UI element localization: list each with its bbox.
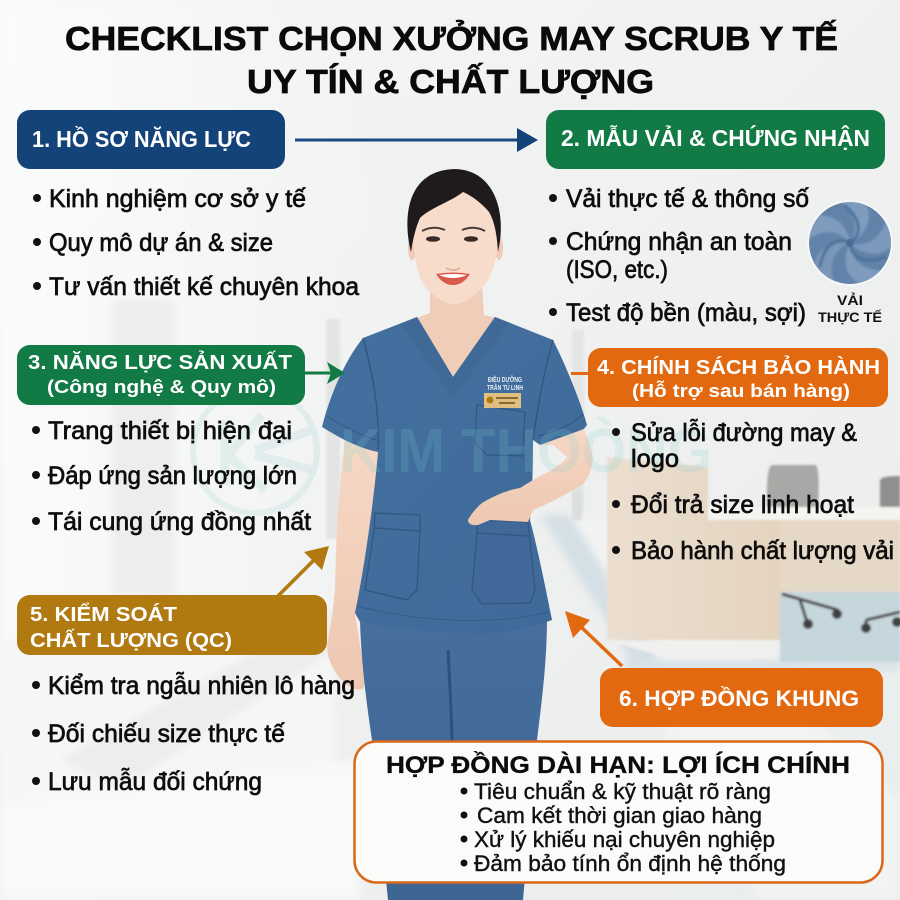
title: UY TÍN & CHẤT LƯỢNG [247,63,654,100]
panel: step 6 heading [600,668,883,727]
facial features [422,228,485,285]
panel: long-term contract benefits [354,742,882,882]
panel: step 5 heading: CHẤT LƯỢNG (QC) [30,629,232,652]
trousers [360,618,547,900]
benefits heading: HỢP ĐỒNG DÀI HẠN: LỢI ÍCH CHÍNH [386,751,850,779]
list: step 5 items [32,671,355,796]
arrow: step 4 connector [571,372,591,375]
list: step 1 items [33,185,359,301]
panel: step 2 heading: 2. MẪU VẢI & CHỨNG NHẬN [561,123,870,151]
hair [407,169,501,252]
panel: step 5 heading [17,595,327,655]
list: step 3 items: Trang thiết bị hiện đại [48,417,292,445]
list: step 4 items: Sửa lỗi đường may & [631,418,857,447]
fabric label [818,292,882,325]
arrow: step 6 to figure [565,611,622,666]
watermark logo [193,389,317,513]
right pocket [472,520,535,604]
list: step 1 items: Tư vấn thiết kế chuyên khoa [49,273,359,301]
arrow: step 1 to 2 [295,128,538,152]
panel: step 2 heading [546,110,885,169]
panel: step 3 heading: (Công nghệ & Quy mô) [47,377,276,397]
scrub top [322,317,587,634]
list: step 4 items: Đổi trả size linh hoạt [631,491,854,519]
panel: step 4 heading: (Hỗ trợ sau bán hàng) [632,380,850,401]
list: step 1 items: Quy mô dự án & size [49,229,273,257]
figure: nurse in blue scrubs [322,169,593,900]
panel: step 3 heading [17,345,305,405]
benefits list: Xử lý khiếu nại chuyên nghiệp [474,827,775,852]
left pocket [365,513,420,600]
fabric label: THỰC TẾ [818,309,882,325]
panel: step 1 heading [17,110,285,169]
list: step 3 items [32,417,311,536]
list: step 2 items: Vải thực tế & thông số [566,185,809,213]
panel: step 4 heading [588,348,888,407]
panel: step 4 heading: 4. CHÍNH SÁCH BẢO HÀNH [597,356,880,379]
left arm [327,440,378,689]
reception desk [607,457,780,640]
doors [326,319,340,539]
panel: step 6 heading: 6. HỢP ĐỒNG KHUNG [619,686,859,711]
panel: step 1 heading: 1. HỒ SƠ NĂNG LỰC [32,125,251,152]
face [413,186,498,304]
list: step 4 items: Bảo hành chất lượng vải [631,537,894,565]
name badge [484,393,521,408]
benefits list [460,779,786,876]
list: step 1 items: Kinh nghiệm cơ sở y tế [49,185,306,213]
list: step 2 items: Test độ bền (màu, sợi) [566,299,806,327]
list: step 3 items: Tái cung ứng đồng nhất [48,508,311,536]
list: step 5 items: Đối chiếu size thực tế [48,720,285,748]
embroidered name: TRẦN TÚ LINH [487,382,523,392]
panel: step 3 heading: 3. NĂNG LỰC SẢN XUẤT [28,351,292,374]
fabric label: VẢI [837,292,863,308]
list: step 5 items: Lưu mẫu đối chứng [48,767,262,796]
title: CHECKLIST CHỌN XƯỞNG MAY SCRUB Y TẾ [65,20,838,57]
arrow: step 3 to figure [305,362,345,384]
watermark text: KIM THOÒNG [340,417,712,486]
benefits list: Đảm bảo tính ổn định hệ thống [474,851,786,876]
list: step 4 items [612,418,894,565]
neck [417,285,497,380]
list: step 2 items: Chứng nhận an toàn [566,228,792,256]
list: step 2 items [549,185,809,327]
ears [408,236,416,260]
title [65,20,838,100]
list: step 3 items: Đáp ứng sản lượng lớn [48,462,297,490]
list: step 4 items: logo [631,445,679,473]
embroidered name: ĐIỀU DƯỠNG [488,374,522,384]
icon: fabric swatch [807,200,893,286]
list: step 5 items: Kiểm tra ngẫu nhiên lô hàng [48,671,355,700]
arrow: step 5 to figure [278,546,329,596]
right arm and hand [468,429,593,525]
chest pocket [475,405,525,456]
list: step 2 items: (ISO, etc.) [566,256,668,284]
panel: step 5 heading: 5. KIỂM SOÁT [30,603,177,626]
benefits list: Cam kết thời gian giao hàng [477,803,762,828]
benefits list: Tiêu chuẩn & kỹ thuật rõ ràng [474,779,771,804]
embroidered name [487,374,523,392]
